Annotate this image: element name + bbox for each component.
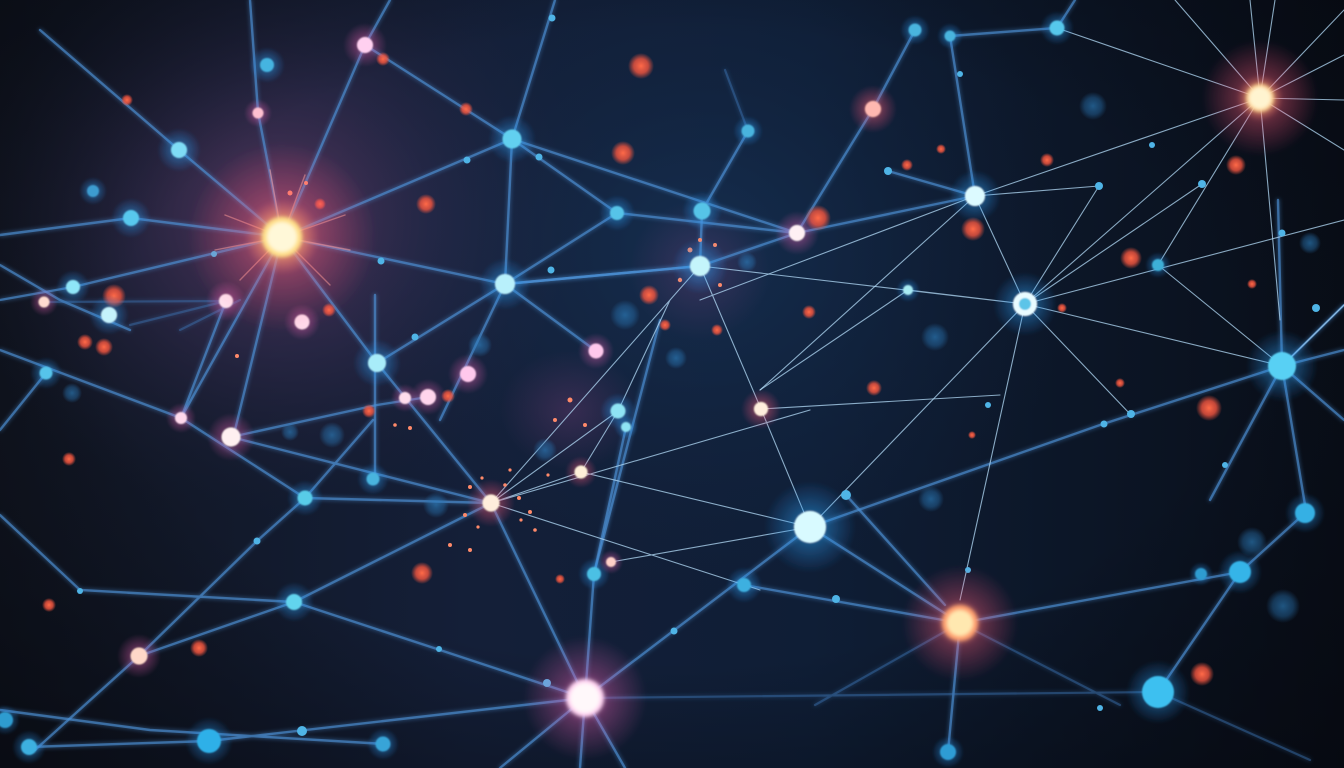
starburst rays around golden hub (215, 170, 350, 285)
hub node: lower-right orange (902, 565, 1018, 681)
particle cluster around central node (235, 181, 722, 552)
hub node: upper-right orange (1202, 40, 1318, 156)
hub nodes: bright blue (764, 170, 1318, 724)
out-of-focus background dots (62, 92, 1321, 623)
thin bright connection lines (491, 0, 1344, 600)
pink nodes (30, 23, 897, 678)
hub node: upper-left golden (187, 142, 377, 332)
hub node: bottom pink (523, 636, 647, 760)
small orange particles (42, 52, 1257, 686)
